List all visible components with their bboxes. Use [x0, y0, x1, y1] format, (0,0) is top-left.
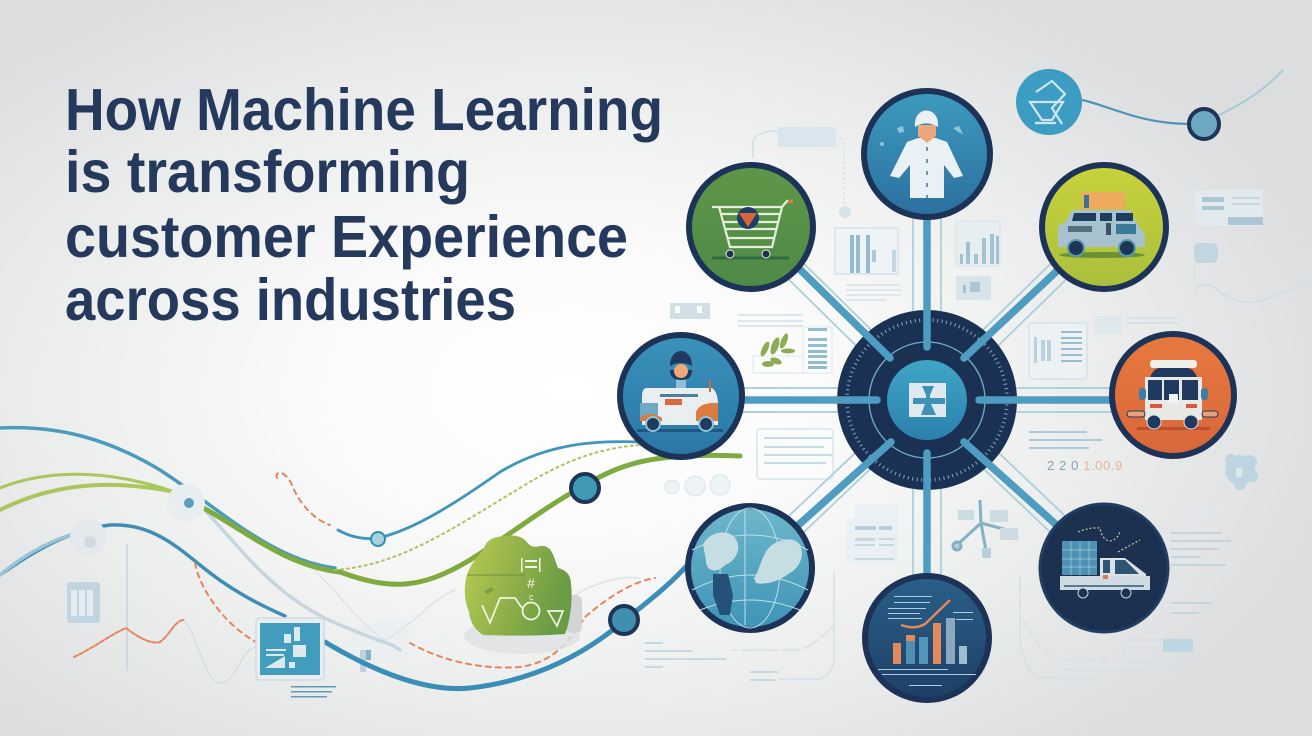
orange dashes — [74, 473, 655, 668]
green math cloud: c — [529, 592, 534, 602]
left flow lines — [0, 428, 740, 689]
faded document — [846, 504, 899, 564]
faded gray-blue strand — [205, 510, 400, 650]
top right connector line — [1082, 100, 1190, 124]
faded lines bottom — [732, 572, 1193, 679]
green dotted — [335, 445, 640, 570]
faded wave lines — [184, 620, 256, 683]
faded note above the cart — [753, 127, 851, 218]
blue line upper right — [338, 442, 640, 539]
text lines under card — [291, 686, 336, 698]
circle: bar chart — [865, 576, 989, 700]
faded badge — [1163, 639, 1193, 652]
faded chart panel — [1029, 316, 1179, 379]
hub core — [887, 360, 967, 440]
green math cloud: # — [527, 575, 535, 591]
central hub — [745, 215, 1112, 580]
faded background charts and documents — [350, 127, 1308, 681]
flow node lower dark — [610, 606, 638, 634]
blue line four — [325, 560, 692, 689]
faded card and vehicle upper right — [1110, 142, 1263, 320]
title: is transforming — [65, 139, 470, 205]
faded bar chart left — [835, 228, 898, 274]
note card below leaf — [757, 429, 833, 479]
faded network icon — [953, 500, 1018, 558]
circle: orange vehicle — [1112, 334, 1234, 456]
faded node: gear lower — [70, 519, 106, 555]
blue line three — [0, 525, 285, 616]
faded gems — [665, 475, 730, 496]
top right icon — [1016, 69, 1082, 135]
faded text lines right of hub — [1029, 431, 1102, 449]
title: customer Experience — [65, 204, 628, 270]
connector spokes: thin guides — [740, 218, 1112, 576]
title — [65, 77, 663, 333]
hub spokes — [745, 215, 1112, 580]
leaf note — [753, 327, 832, 373]
circle: delivery van with person — [620, 335, 742, 457]
circle: top person — [864, 91, 990, 217]
faded bar chart right — [956, 221, 1000, 300]
circle: lime van — [1042, 165, 1166, 289]
faded table icon — [67, 582, 100, 623]
faded text block right — [1171, 532, 1231, 614]
faded glass chart — [350, 620, 408, 675]
analysis card — [256, 618, 324, 680]
flow node small teal — [371, 532, 385, 546]
blue line one — [0, 428, 335, 568]
vertical axis — [126, 545, 128, 670]
top right node — [1189, 109, 1219, 139]
flow node upper dark — [571, 474, 599, 502]
faded lines left of bottom chart — [645, 642, 778, 681]
green math cloud — [464, 535, 582, 654]
title: How Machine Learning — [65, 77, 663, 143]
faded wave — [1195, 280, 1308, 302]
number text: 2 2 0 1.00.9 — [1047, 458, 1123, 473]
circle: shopping cart — [689, 165, 813, 289]
faded building icon — [670, 303, 710, 319]
circle: truck — [1040, 504, 1168, 632]
faded header lines — [738, 314, 803, 327]
green lines — [0, 474, 175, 492]
faded cog — [1225, 454, 1258, 490]
faded node: gear upper — [167, 484, 205, 522]
faded block right — [1200, 507, 1220, 517]
top right line tail — [1219, 70, 1283, 115]
circle: globe — [688, 506, 812, 630]
title: across industries — [65, 267, 516, 333]
faded text lines under chart — [846, 284, 901, 301]
